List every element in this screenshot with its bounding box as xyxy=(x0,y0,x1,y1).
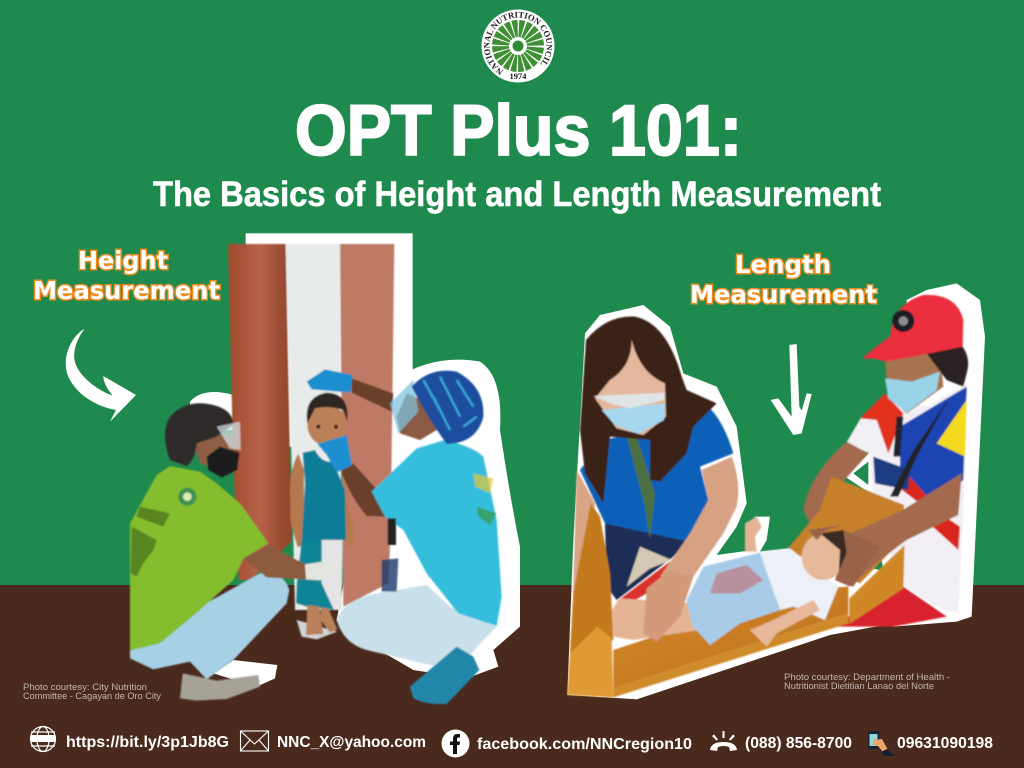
left health worker xyxy=(130,403,335,701)
email: NNC_X@yahoo.com xyxy=(277,734,426,751)
arrow: curved arrow to height photo xyxy=(66,329,136,422)
credit: department of health xyxy=(784,672,950,692)
label: height measurement: Measurement xyxy=(33,276,220,305)
background: brown floor band xyxy=(0,585,1024,768)
icon: envelope xyxy=(240,731,268,751)
telephone number: (088) 856-8700 xyxy=(745,735,852,752)
credit: city nutrition committee: Committee - Cagayan de Oro City xyxy=(23,691,161,702)
credit: city nutrition committee xyxy=(23,682,161,702)
right nutritionist xyxy=(803,295,968,627)
credit: department of health: Nutritionist Dietitian Lanao del Norte xyxy=(784,681,934,692)
halo behind photo xyxy=(567,283,985,699)
icon: mobile in hand xyxy=(868,731,895,756)
wooden measuring board xyxy=(567,477,905,697)
child xyxy=(290,393,355,639)
icon: facebook xyxy=(442,730,470,758)
arrow: down arrow to length photo xyxy=(771,344,812,435)
credit: department of health: Photo courtesy: Department of Health - xyxy=(784,672,950,683)
icon: globe xyxy=(30,726,56,752)
title: OPT Plus 101: xyxy=(295,92,742,171)
label: height measurement xyxy=(33,246,220,305)
footer: contact bar xyxy=(30,726,993,758)
left nutritionist xyxy=(572,317,738,640)
logo: National Nutrition Council seal: 1974 xyxy=(510,71,527,81)
pillar: right pink column xyxy=(340,244,394,607)
facebook page: facebook.com/NNCregion10 xyxy=(477,736,692,753)
pillar: white measuring board xyxy=(286,244,342,610)
website link: https://bit.ly/3p1Jb8G xyxy=(66,734,229,751)
halo behind photo xyxy=(190,233,520,687)
label: length measurement xyxy=(690,250,877,309)
green gap between the two nutritionists xyxy=(853,462,868,485)
gloves xyxy=(307,369,353,393)
pillar: left wooden column xyxy=(228,244,292,580)
label: length measurement: Measurement xyxy=(690,280,877,309)
right health worker xyxy=(307,369,502,704)
photo: length measurement xyxy=(567,283,985,699)
background: green field xyxy=(0,0,1024,586)
subtitle: The Basics of Height and Length Measurement xyxy=(153,175,881,214)
photo: height measurement xyxy=(130,233,520,704)
adult hands xyxy=(643,570,693,642)
credit: city nutrition committee: Photo courtesy: City Nutrition xyxy=(23,682,147,693)
mobile number: 09631090198 xyxy=(897,735,993,752)
label: length measurement: Length xyxy=(735,250,831,279)
logo: National Nutrition Council seal: NATIONAL NUTRITION COUNCIL xyxy=(484,12,552,76)
baby xyxy=(612,473,962,647)
icon: telephone xyxy=(710,731,737,751)
label: height measurement: Height xyxy=(78,246,168,275)
